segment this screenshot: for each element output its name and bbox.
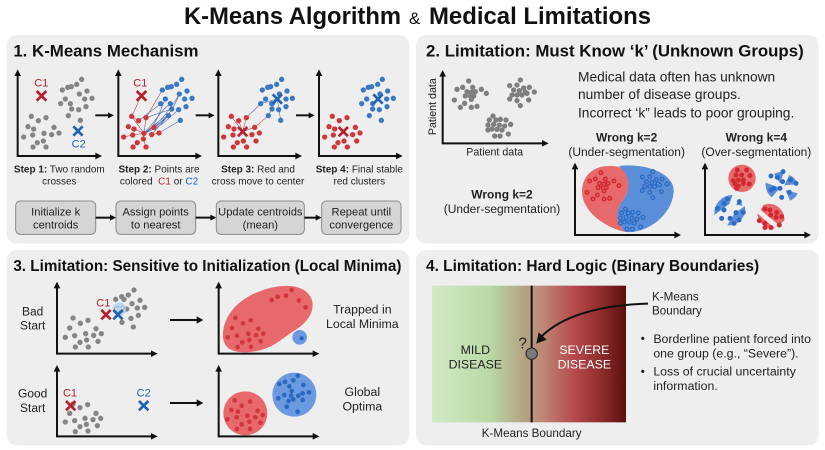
label: trapped: Trapped in	[333, 303, 392, 317]
step captions: crosses	[42, 176, 77, 187]
panel: sensitive to initialization	[7, 250, 409, 445]
label: wrong k=2 above chart: Wrong k=2	[596, 131, 658, 145]
label: wrong k=4: Wrong k=4	[726, 131, 787, 145]
label: good start: Start	[20, 401, 46, 415]
label: bad start: Start	[20, 319, 46, 333]
arrow	[296, 112, 315, 118]
label: bad start: Bad	[22, 304, 43, 318]
gradient diagram: DISEASE	[558, 357, 611, 371]
process flow: to nearest	[131, 220, 181, 232]
label: k-means boundary callout: Boundary	[652, 304, 702, 317]
step captions: Step 2: Points are	[118, 164, 200, 175]
label: global optima: Global	[345, 385, 380, 399]
chart: bad start scatter: C2	[113, 304, 125, 314]
chart: good start scatter	[54, 365, 158, 440]
heading: panel 4: 4. Limitation: Hard Logic (Binary Boundaries)	[426, 258, 759, 275]
arrow	[95, 112, 114, 118]
bullet list	[641, 332, 811, 393]
bullet list: one group (e.g., “Severe”).	[653, 347, 799, 361]
label: global optima	[342, 385, 382, 414]
heading: panel 1: 1. K-Means Mechanism	[13, 42, 199, 61]
label: bad start	[20, 304, 46, 333]
text: medical data note: Incorrect ‘k” leads to poor grouping.	[578, 105, 794, 120]
chart: patient data scatter	[427, 70, 549, 158]
heading: panel 2: 2. Limitation: Must Know ‘k’ (Unknown Groups)	[426, 42, 804, 61]
label: good start	[18, 387, 47, 415]
panel: k-means mechanism	[7, 35, 409, 244]
chart: step 1: C2	[72, 138, 86, 150]
gradient diagram: ?	[518, 335, 527, 352]
label: wrong k=4	[701, 131, 811, 159]
chart: bad start scatter	[54, 282, 158, 357]
text: medical data note	[578, 70, 794, 120]
chart: step 3	[215, 69, 302, 159]
gradient diagram	[432, 286, 626, 422]
chart: k=2	[572, 163, 681, 238]
gradient diagram: MILD	[461, 343, 490, 357]
step captions: cross move to center	[212, 176, 305, 187]
chart: step 4	[316, 69, 403, 159]
arrow	[196, 112, 215, 118]
title: K-Means Algorithm	[184, 3, 401, 30]
chart: patient data scatter: Patient data	[466, 146, 523, 158]
chart: trapped result	[215, 282, 319, 357]
process flow: convergence	[329, 220, 393, 232]
step captions: Step 3: Red and	[221, 164, 295, 175]
process flow: Assign points	[122, 206, 189, 218]
process flow	[16, 201, 401, 234]
title: Medical Limitations	[429, 3, 651, 30]
label: wrong k=2 left: (Under-segmentation)	[444, 202, 560, 216]
step captions	[14, 164, 403, 187]
chart: patient data scatter: Patient data	[427, 78, 439, 135]
bullet list: information.	[653, 379, 718, 393]
label: wrong k=2 above chart	[568, 131, 685, 159]
chart: step 1: C1	[34, 78, 48, 90]
step captions: Step 4: Final stable	[316, 164, 403, 175]
gradient diagram: SEVERE	[559, 343, 609, 357]
step captions: red clusters	[334, 176, 385, 187]
process flow: centroids	[33, 220, 79, 232]
label: k-means boundary callout: K-Means	[652, 291, 699, 304]
chart: good start scatter: C2	[137, 388, 151, 400]
text: medical data note: number of disease groups.	[578, 87, 741, 102]
panel: must know k	[416, 35, 819, 244]
arrow	[170, 399, 203, 407]
step captions: Step 1: Two random	[14, 164, 105, 175]
bullet list: •	[641, 332, 645, 346]
label: wrong k=2 left: Wrong k=2	[471, 188, 533, 202]
bullet list: Borderline patient forced into	[653, 332, 811, 346]
heading: panel 3: 3. Limitation: Sensitive to Initialization (Local Minima)	[13, 258, 401, 275]
chart: good start scatter: C1	[63, 388, 77, 400]
title: &	[409, 9, 421, 28]
process flow: Initialize k	[31, 206, 81, 218]
arrow	[170, 316, 203, 324]
bullet list: Loss of crucial uncertainty	[653, 365, 797, 379]
gradient diagram: DISEASE	[449, 357, 502, 371]
bullet list: •	[641, 364, 645, 378]
chart: step 1	[14, 69, 102, 159]
panel: hard logic	[416, 250, 819, 445]
label: global optima: Optima	[342, 400, 382, 414]
chart: global optima result	[215, 365, 319, 440]
text: medical data note: Medical data often has unknown	[578, 70, 775, 85]
process flow: Update centroids	[218, 206, 303, 218]
label: axis caption: K-Means Boundary	[482, 427, 582, 440]
chart: k=4	[702, 163, 811, 238]
arrow: boundary callout	[536, 304, 648, 344]
label: k-means boundary callout	[652, 291, 702, 317]
chart: bad start scatter: C1	[96, 297, 110, 309]
label: wrong k=2 above chart: (Under-segmentation)	[568, 145, 685, 159]
label: trapped: Local Minima	[326, 317, 399, 331]
label: trapped	[326, 303, 399, 331]
label: wrong k=2 left	[444, 188, 560, 216]
label: good start: Good	[18, 387, 47, 401]
process flow: (mean)	[243, 220, 278, 232]
title	[184, 3, 651, 30]
chart: step 2	[115, 69, 202, 159]
label: wrong k=4: (Over-segmentation)	[701, 145, 811, 159]
process flow: Repeat until	[332, 206, 391, 218]
step captions: colored C1 or C2	[120, 176, 199, 187]
chart: step 2: C1	[133, 78, 147, 90]
